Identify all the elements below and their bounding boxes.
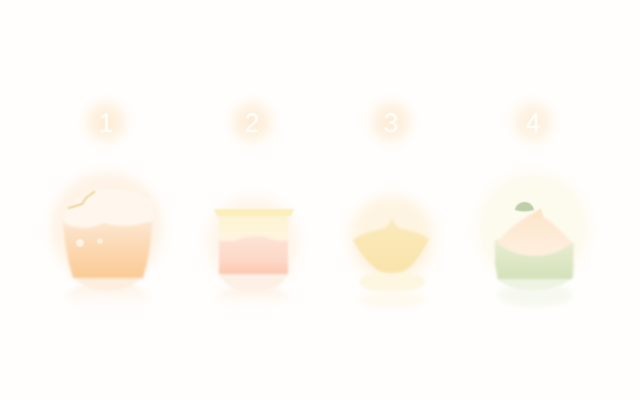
- halo: [349, 195, 435, 281]
- glass foot: [219, 268, 288, 291]
- badge: number 2: [222, 92, 282, 152]
- badge: number 1: 1: [98, 108, 114, 138]
- reflection: [65, 283, 149, 313]
- reflection: [215, 286, 291, 310]
- halo: [206, 195, 300, 289]
- cake base: [495, 262, 574, 290]
- badge: number 2: 2: [244, 108, 260, 138]
- badge: number 4: 4: [525, 108, 541, 138]
- peach dome: [497, 212, 572, 256]
- yellow rim: [214, 209, 294, 216]
- cup body: [63, 222, 152, 278]
- cup base shadow: [66, 240, 150, 290]
- cream top: [64, 190, 153, 228]
- illustration 1: orange cup with cream: [51, 172, 163, 313]
- garnish sprig: [69, 192, 94, 208]
- illustration 3: yellow bowl: [349, 195, 435, 309]
- bubbles: [76, 239, 84, 247]
- badge: number 3: 3: [383, 108, 399, 138]
- badge: number 3: [361, 92, 421, 152]
- fruit top: [531, 208, 543, 218]
- pink layer: [219, 236, 288, 274]
- badge: number 1: [76, 92, 136, 152]
- reflection: [497, 283, 573, 307]
- upper layer: [219, 212, 288, 244]
- reflection: [359, 271, 425, 293]
- illustration 4: green cake with peach dome: [476, 171, 590, 307]
- halo: [51, 172, 163, 284]
- halo: [476, 171, 590, 285]
- bowl: [353, 218, 429, 273]
- illustration 2: layered pink glass: [206, 195, 300, 310]
- leaf: [515, 202, 534, 212]
- badge: number 4: [503, 92, 563, 152]
- cake body: [495, 240, 574, 279]
